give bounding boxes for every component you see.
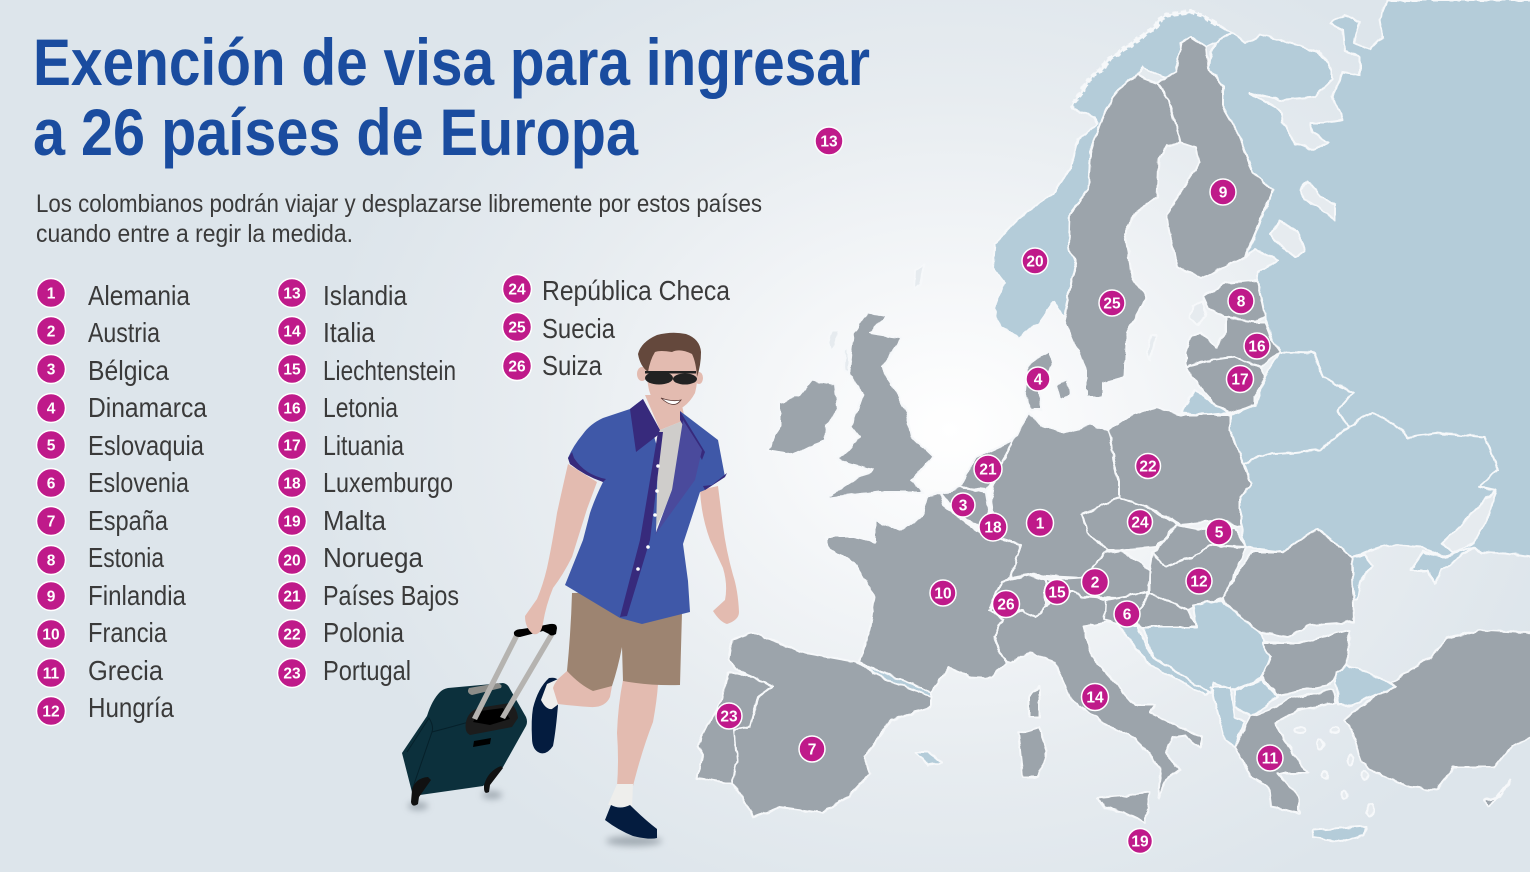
Croatian coast — [1118, 625, 1211, 695]
country list: column 1: 7 — [47, 514, 55, 530]
Austria — [1045, 550, 1150, 598]
country list: column 2: 16 — [283, 400, 301, 418]
Cyprus — [1484, 780, 1510, 806]
Sweden — [1064, 75, 1181, 397]
map markers — [716, 127, 1283, 854]
marker 23 Portugal — [716, 703, 742, 729]
marker 13 Islandia: 13 — [820, 134, 838, 150]
country list: column 3: Suecia — [542, 313, 615, 344]
lake Ladoga — [1270, 221, 1304, 258]
country list: column 2: 17 — [283, 438, 301, 454]
marker 15 Liechtenstein: 15 — [1048, 584, 1066, 602]
sea of Azov — [1442, 490, 1495, 553]
marker 8 Estonia — [1228, 288, 1254, 314]
title: Exención de visa para ingresar — [33, 25, 870, 99]
Romania — [1222, 528, 1354, 637]
marker 26 Suiza — [992, 590, 1020, 618]
marker 6 Eslovenia — [1114, 601, 1140, 627]
country list: column 2: Letonia — [323, 392, 398, 423]
country list: column 2: Portugal — [323, 655, 411, 686]
Aegean islands — [1295, 727, 1373, 817]
subtitle — [36, 190, 762, 248]
Shetland and Hebrides islands — [828, 265, 924, 372]
Slovenia — [1105, 592, 1149, 625]
country list: column 1: Francia — [88, 617, 167, 648]
Denmark — [1025, 350, 1052, 410]
marker 18 Luxemburgo — [979, 513, 1007, 541]
Czech Republic — [1082, 498, 1177, 550]
marker 21 Países Bajos — [974, 455, 1002, 483]
Croatia north — [1137, 593, 1196, 627]
country list: column 1: 12 — [42, 704, 60, 720]
standing shoe — [605, 805, 657, 839]
sock — [608, 784, 633, 808]
country list: column 2: 21 — [283, 588, 301, 606]
marker 20 Noruega — [1022, 248, 1048, 274]
marker 16 Letonia — [1244, 333, 1270, 359]
smile — [661, 398, 681, 405]
country list: column 2: 13 — [283, 286, 301, 302]
shorts — [567, 592, 682, 691]
marker 19 Malta: 19 — [1131, 834, 1149, 850]
marker 16 Letonia: 16 — [1248, 338, 1266, 356]
marker 9 Finlandia — [1210, 179, 1236, 205]
raised shoe — [532, 678, 558, 753]
country list: column 1: Bélgica — [88, 355, 169, 386]
shadows — [408, 791, 662, 846]
Danish islands — [1056, 380, 1070, 400]
Greece — [1235, 690, 1336, 813]
marker 1 Alemania: 1 — [1036, 516, 1045, 532]
marker 6 Eslovenia: 6 — [1123, 606, 1132, 624]
marker 7 España: 7 — [808, 742, 816, 758]
country list: column 2: 19 — [283, 514, 301, 530]
Norway — [993, 12, 1231, 337]
title: a 26 países de Europa — [33, 95, 639, 169]
raised foot sock — [541, 679, 560, 709]
marker 24 República Checa: 24 — [1131, 514, 1149, 532]
Spain — [729, 633, 931, 818]
right arm and hand — [700, 486, 739, 624]
European Turkey — [1336, 665, 1397, 705]
marker 20 Noruega: 20 — [1026, 254, 1044, 270]
map of Europe — [697, 0, 1530, 842]
country list: column 2: Polonia — [323, 617, 404, 648]
Bay sliver near Pyrenees — [856, 662, 931, 697]
Crimea — [1410, 547, 1474, 583]
marker 22 Polonia: 22 — [1139, 458, 1157, 476]
country list: column 2: Liechtenstein — [323, 355, 456, 386]
marker 22 Polonia — [1136, 454, 1160, 478]
country list: column 1: Hungría — [88, 692, 174, 723]
country list: column 2 — [278, 278, 459, 688]
illustration: traveller with suitcase — [402, 333, 739, 846]
Estonia — [1203, 280, 1265, 322]
country list: column 3: 24 — [508, 282, 526, 298]
country list: column 1: Estonia — [88, 542, 164, 573]
standing leg — [617, 680, 658, 786]
country list: column 1: España — [88, 505, 168, 536]
Germany — [991, 413, 1119, 578]
United Kingdom — [825, 312, 933, 498]
country list: column 2: Países Bajos — [323, 580, 459, 611]
Saaremaa island — [1190, 302, 1206, 325]
marker 5 Eslovaquia: 5 — [1215, 524, 1224, 542]
border: Belarus and Ukraine south — [1243, 427, 1348, 465]
country list: column 2: Malta — [323, 505, 386, 536]
suitcase — [402, 683, 527, 806]
marker 24 República Checa — [1128, 510, 1152, 534]
country list: column 2: 20 — [283, 552, 301, 570]
Ireland — [768, 380, 838, 455]
country list: column 3 — [502, 274, 730, 381]
Italy — [989, 590, 1201, 797]
country list: column 1: 4 — [47, 400, 56, 418]
Sardinia — [1018, 727, 1047, 777]
country list: column 3: 25 — [508, 320, 526, 336]
country list: column 2: 23 — [283, 666, 301, 682]
country list: column 1: 11 — [43, 666, 60, 682]
sunglasses — [645, 371, 697, 384]
Finland — [1157, 37, 1273, 278]
Bulgaria — [1262, 630, 1349, 695]
country list: column 3: 26 — [508, 358, 526, 376]
ears — [637, 367, 703, 384]
undershirt — [655, 420, 685, 530]
Corsica — [1029, 687, 1039, 717]
lake Onega — [1300, 181, 1335, 220]
Switzerland — [989, 575, 1045, 618]
country list: column 1: 9 — [47, 588, 56, 606]
marker 15 Liechtenstein — [1044, 580, 1070, 604]
marker 4 Dinamarca — [1026, 367, 1050, 391]
raised leg — [553, 671, 612, 707]
region: Russia, Belarus and Ukraine — [1208, 0, 1530, 558]
marker 17 Lituania — [1226, 366, 1254, 392]
Kaliningrad — [1181, 390, 1230, 415]
country list: column 1: Austria — [88, 317, 160, 348]
Netherlands — [960, 440, 1013, 490]
Crete — [1313, 826, 1366, 842]
collar and placket — [568, 399, 727, 617]
Sicily — [1097, 793, 1150, 823]
marker 3 Bélgica — [951, 493, 975, 517]
country list: column 2: 14 — [283, 324, 301, 340]
marker 4 Dinamarca: 4 — [1034, 372, 1043, 388]
country list: column 2: Islandia — [323, 280, 407, 311]
Hungary — [1150, 545, 1246, 610]
country list: column 1: 6 — [47, 476, 56, 492]
Albania — [1211, 687, 1245, 747]
country list: column 1 — [36, 278, 207, 726]
North Macedonia — [1235, 680, 1278, 717]
subtitle: cuando entre a regir la medida. — [36, 220, 353, 248]
suitcase handle — [472, 624, 557, 720]
Turkey — [1344, 630, 1530, 790]
shirt — [565, 399, 725, 624]
country list: column 2: Italia — [323, 317, 375, 348]
France — [827, 493, 1021, 692]
marker 5 Eslovaquia — [1206, 519, 1232, 545]
borders: Belarus and Ukraine — [1280, 352, 1498, 490]
marker 17 Lituania: 17 — [1231, 372, 1249, 388]
left arm and hand — [525, 464, 597, 634]
marker 9 Finlandia: 9 — [1219, 184, 1228, 202]
marker 1 Alemania — [1026, 510, 1054, 536]
Bosnia, Serbia and Montenegro — [1143, 600, 1270, 693]
marker 11 Grecia — [1257, 745, 1283, 771]
Belgium — [941, 487, 989, 527]
Gotland island — [1147, 335, 1156, 360]
Majorca — [915, 752, 942, 765]
marker 25 Suecia — [1099, 290, 1125, 316]
country list: column 1: 8 — [47, 552, 56, 570]
marker 23 Portugal: 23 — [720, 708, 738, 726]
country list: column 3: República Checa — [542, 275, 730, 306]
country list: column 1: 1 — [47, 286, 56, 302]
country list: column 1: Finlandia — [88, 580, 186, 611]
country list: column 1: 2 — [47, 324, 55, 340]
marker 3 Bélgica: 3 — [959, 498, 968, 514]
subtitle: Los colombianos podrán viajar y desplazarse libremente por estos países — [36, 190, 762, 218]
title — [33, 25, 870, 169]
Norwegian fjord fringe — [1071, 12, 1216, 108]
marker 13 Islandia — [815, 127, 843, 155]
marker 11 Grecia: 11 — [1262, 750, 1279, 768]
country list: column 2: 15 — [283, 362, 301, 378]
country list: column 1: Alemania — [88, 280, 190, 311]
country list: column 2: Luxemburgo — [323, 467, 453, 498]
Portugal — [697, 673, 772, 783]
country list: column 2: 22 — [283, 626, 301, 644]
neck — [645, 395, 685, 430]
marker 10 Francia: 10 — [934, 586, 952, 602]
buttons — [636, 464, 660, 571]
marker 2 Austria: 2 — [1091, 574, 1099, 592]
country list: column 1: 5 — [47, 438, 56, 454]
country list: column 2: Lituania — [323, 430, 404, 461]
marker 8 Estonia: 8 — [1237, 294, 1246, 310]
country list: column 3: Suiza — [542, 350, 602, 381]
Moldova — [1341, 555, 1373, 600]
marker 18 Luxemburgo: 18 — [984, 520, 1002, 536]
marker 21 Países Bajos: 21 — [979, 462, 997, 478]
country list: column 2: Noruega — [323, 542, 423, 573]
country list: column 1: Grecia — [88, 655, 163, 686]
marker 14 Italia: 14 — [1086, 690, 1104, 706]
marker 19 Malta — [1128, 828, 1152, 854]
country list: column 1: Dinamarca — [88, 392, 207, 423]
marker 12 Hungría — [1186, 568, 1212, 594]
marker 2 Austria — [1082, 568, 1108, 596]
country list: column 1: Eslovenia — [88, 467, 189, 498]
country list: column 1: Eslovaquia — [88, 430, 204, 461]
marker 14 Italia — [1082, 684, 1108, 710]
marker 25 Suecia: 25 — [1103, 296, 1121, 312]
Lithuania — [1186, 357, 1265, 413]
country list: column 1: 10 — [42, 626, 60, 644]
Poland — [1108, 407, 1251, 527]
Luxembourg — [981, 515, 997, 540]
marker 10 Francia — [930, 580, 956, 606]
marker 12 Hungría: 12 — [1190, 574, 1208, 590]
country list: column 2: 18 — [283, 476, 301, 492]
marker 7 España — [799, 736, 825, 762]
head — [647, 347, 697, 413]
Latvia — [1186, 318, 1280, 367]
Slovakia — [1153, 525, 1246, 567]
hair — [638, 333, 701, 377]
country list: column 1: 3 — [47, 362, 56, 378]
marker 26 Suiza: 26 — [997, 596, 1015, 614]
